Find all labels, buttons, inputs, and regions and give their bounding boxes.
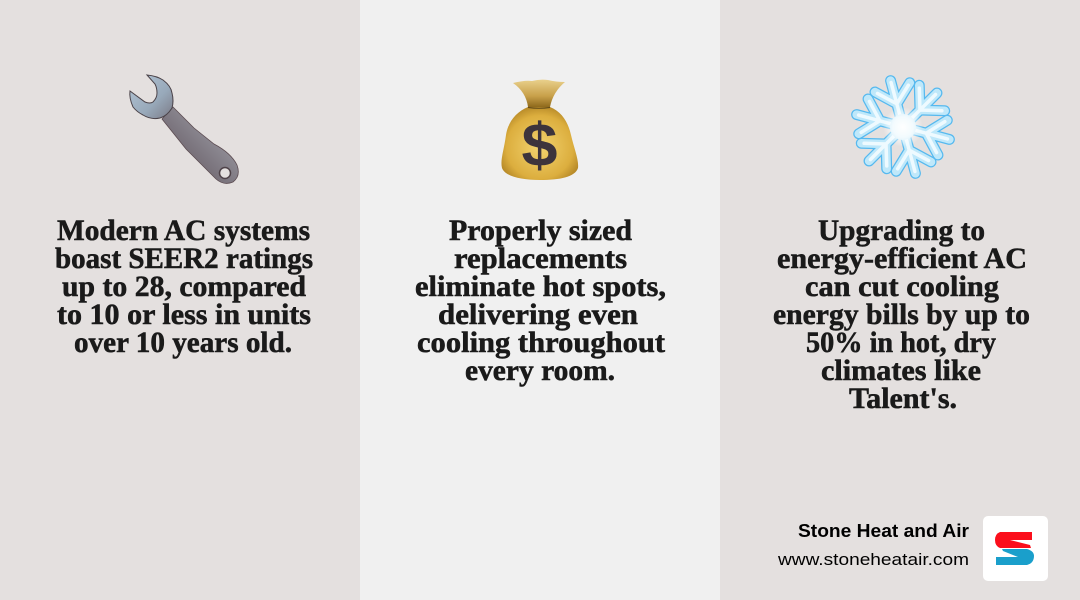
heading: cooling text: cooling throughout [417,326,665,359]
heading: cooling text [415,214,666,387]
icon: wrench [130,75,238,183]
icon: dollar sign: $ [522,111,558,179]
brand name: Stone Heat and Air [798,521,969,541]
heading: cooling text: every room. [465,354,615,387]
icon: snowflake [852,76,954,178]
heading: savings text: energy-efficient AC [777,242,1027,275]
panel: SEER2 ratings [0,0,360,600]
heading: cooling text: replacements [454,242,627,275]
heading: savings text: Talent's. [849,382,957,415]
heading: savings text: energy bills by up to [773,298,1030,331]
heading: savings text: Upgrading to [818,214,985,247]
heading: savings text: 50% in hot, dry [806,326,996,359]
heading: SEER2 text: boast SEER2 ratings [55,242,313,275]
heading: cooling text: eliminate hot spots, [415,270,666,303]
heading: cooling text: delivering even [438,298,638,331]
panel: energy savings [720,0,1080,600]
heading: savings text: climates like [821,354,981,387]
logo [983,516,1048,581]
heading: SEER2 text: up to 28, compared [62,270,306,303]
icon: money bag [501,80,578,180]
heading: savings text [773,214,1030,415]
website: www.stoneheatair.com [777,550,969,569]
panel: even cooling [360,0,720,600]
heading: SEER2 text: to 10 or less in units [57,298,311,331]
heading: SEER2 text [55,214,313,359]
heading: SEER2 text: over 10 years old. [74,326,292,359]
heading: cooling text: Properly sized [449,214,632,247]
heading: SEER2 text: Modern AC systems [57,214,310,247]
heading: savings text: can cut cooling [805,270,999,303]
